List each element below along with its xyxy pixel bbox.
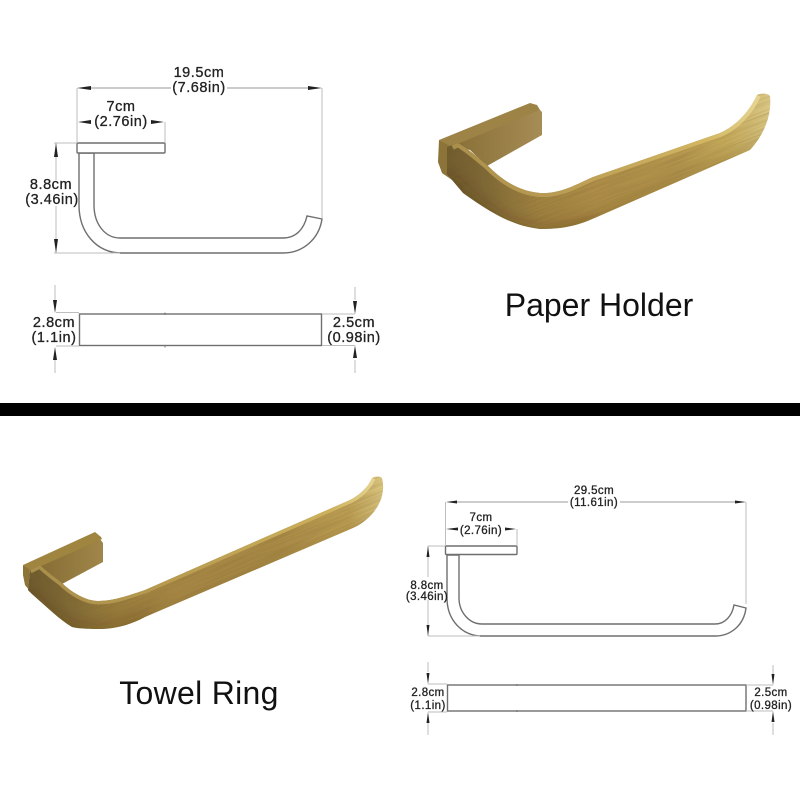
wall plate face (30, 535, 103, 584)
dimension: depth 2.5cm: 2.5cm (333, 315, 375, 331)
divider bar (0, 403, 800, 416)
arm (28, 476, 384, 629)
wall plate top ledge (439, 103, 540, 147)
dimension: depth 2.5cm: 2.5cm (754, 687, 788, 699)
dimension: height 8.8cm (406, 546, 480, 636)
arm top band (30, 478, 372, 601)
dimension: overall width 29.5cm: (11.61in) (570, 497, 618, 509)
side view outline (448, 684, 746, 712)
dimension drawing: paper holder (25, 65, 381, 373)
wall plate front lip (438, 140, 452, 180)
product photo: towel ring (23, 476, 384, 629)
dimension: depth 2.5cm: (0.98in) (327, 330, 381, 346)
dimension: depth 2.8cm: (1.1in) (32, 330, 76, 346)
dimension: depth 2.5cm: (0.98in) (750, 700, 792, 712)
dimension: overall width 29.5cm: 29.5cm (574, 485, 614, 497)
label: Towel Ring: Towel Ring (119, 675, 279, 711)
dimension: depth 2.5cm (322, 287, 381, 373)
dimension: height 8.8cm (25, 143, 120, 253)
dimension: depth 2.8cm (410, 662, 447, 735)
dimension: plate width 7cm: 7cm (470, 512, 492, 524)
dimension: overall width 19.5cm: (7.68in) (172, 80, 226, 96)
dimension: plate width 7cm (446, 512, 517, 546)
dimension: height 8.8cm: (3.46in) (406, 591, 448, 603)
dimension: plate width 7cm: (2.76in) (94, 114, 148, 130)
dimension: height 8.8cm: 8.8cm (30, 177, 72, 193)
dimension: depth 2.8cm: 2.8cm (33, 315, 75, 331)
product photo: paper holder (438, 94, 770, 229)
dimension: depth 2.8cm: (1.1in) (410, 700, 446, 712)
wall plate top ledge (23, 532, 102, 571)
label: Paper Holder: Paper Holder (505, 287, 694, 323)
dimension: height 8.8cm: 8.8cm (410, 580, 444, 592)
dimension: plate width 7cm: 7cm (106, 99, 136, 115)
front view outline (77, 143, 322, 253)
dimension drawing: towel ring (406, 485, 792, 735)
front view outline (446, 546, 746, 636)
dimension: overall width 19.5cm: 19.5cm (174, 65, 224, 81)
dimension: depth 2.5cm (746, 665, 792, 735)
side view outline (80, 312, 322, 348)
dimension: height 8.8cm: (3.46in) (25, 192, 79, 208)
dimension: plate width 7cm: (2.76in) (460, 525, 502, 537)
arm (447, 94, 770, 229)
wall plate front lip (23, 565, 33, 595)
arm top band (452, 95, 757, 193)
dimension: overall width 19.5cm (77, 65, 322, 218)
dimension: plate width 7cm (78, 99, 165, 143)
wall plate face (450, 107, 542, 166)
dimension: depth 2.8cm (32, 285, 79, 373)
dimension: depth 2.8cm: 2.8cm (411, 687, 445, 699)
dimension: overall width 29.5cm (446, 485, 746, 604)
